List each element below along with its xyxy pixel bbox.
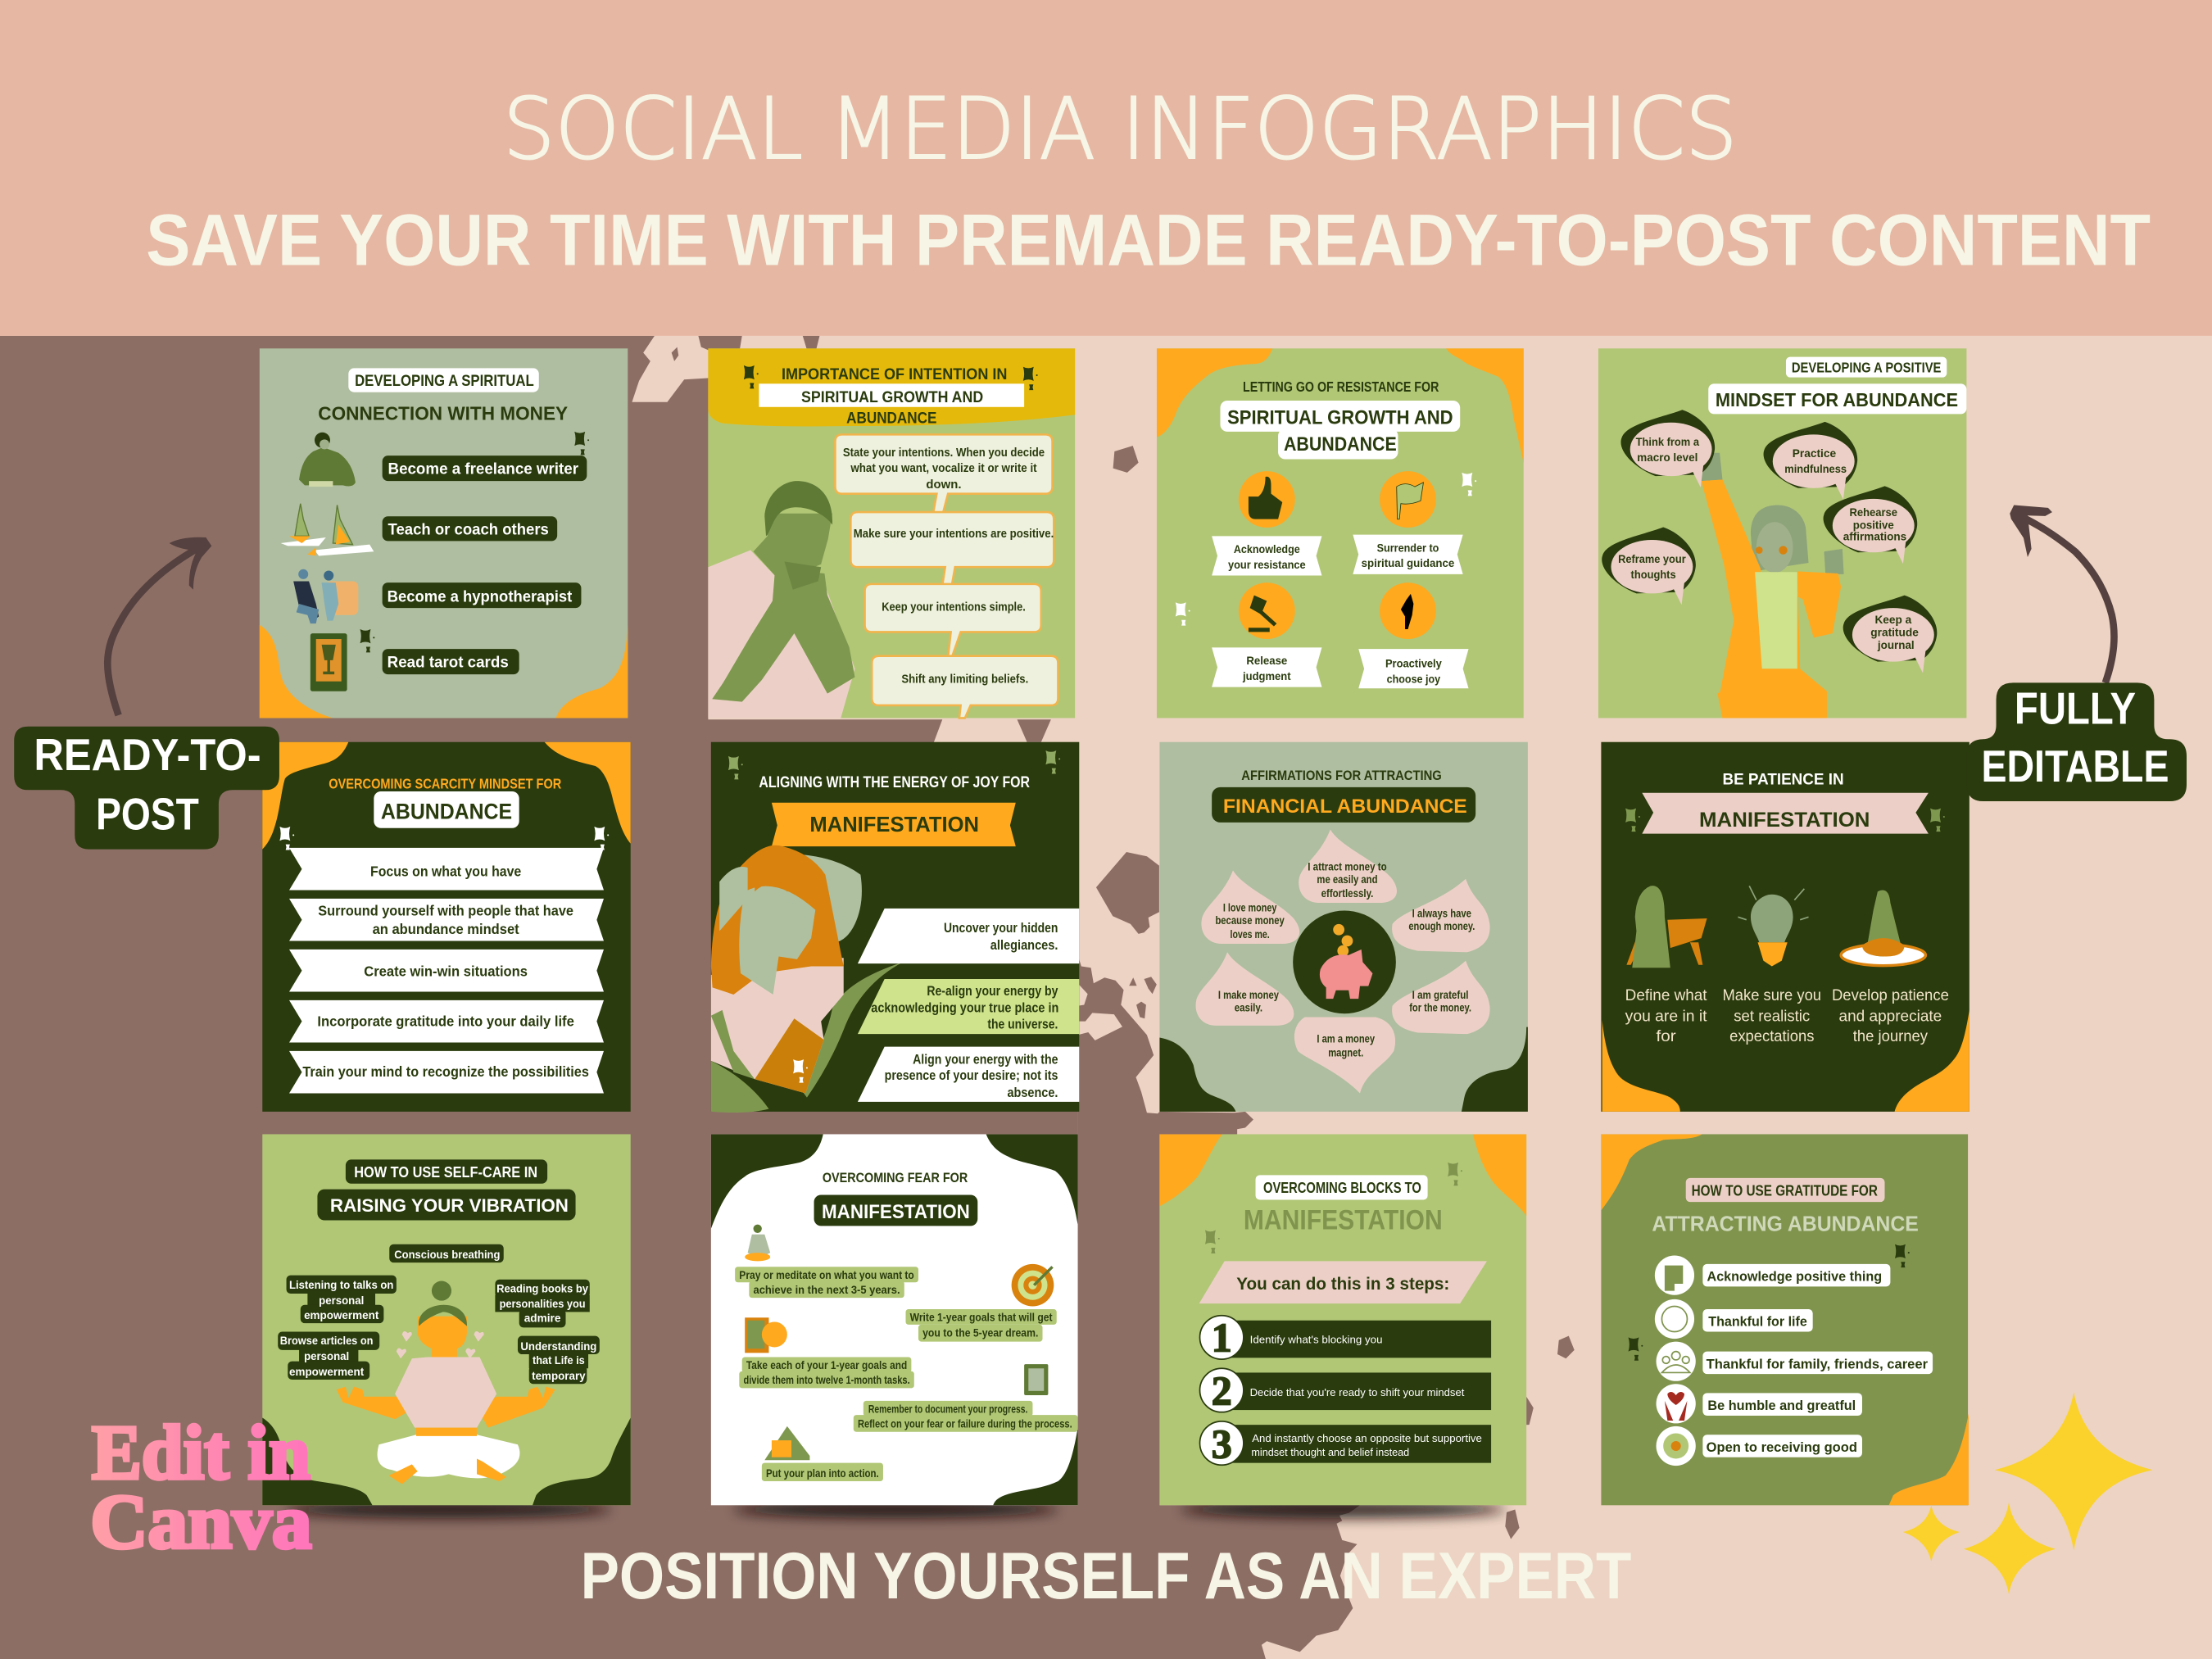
arrow: left <box>107 537 211 715</box>
icons: circles <box>1239 471 1436 639</box>
heading: MANIFESTATION <box>809 814 979 836</box>
list: items: Read tarot cards <box>388 654 509 671</box>
list: items: Become a hypnotherapist <box>388 588 573 605</box>
labels: Understanding <box>520 1340 596 1353</box>
list: items <box>383 456 587 674</box>
bubble text: macro level <box>1637 451 1698 464</box>
captions: Make sure you <box>1722 987 1821 1004</box>
steps: 2 <box>1212 1368 1232 1413</box>
pill text: Take each of your 1-year goals and <box>746 1359 907 1371</box>
panels: Re-align your energy by <box>927 984 1058 999</box>
bubble text: Keep your intentions simple. <box>882 601 1026 614</box>
icon rows <box>1655 1256 1696 1466</box>
bubble text <box>843 446 1054 686</box>
ribbon text: Surround yourself with people that have <box>318 903 573 919</box>
pill text: Pray or meditate on what you want to <box>739 1269 914 1281</box>
arrow: right <box>2010 505 2115 682</box>
petal text: easily. <box>1235 1002 1262 1014</box>
labels <box>278 1244 600 1384</box>
panels <box>858 909 1079 1102</box>
pill text <box>739 1269 1072 1480</box>
labels: Browse articles on <box>280 1335 373 1347</box>
labels: admire <box>524 1312 561 1324</box>
pill text: Put your plan into action. <box>766 1467 879 1480</box>
labels: personal <box>304 1350 349 1362</box>
bubble text: thoughts <box>1631 569 1676 581</box>
petal text: I make money <box>1218 989 1279 1001</box>
labels: temporary <box>532 1370 586 1382</box>
speech bubbles <box>835 434 1058 718</box>
heading: ABUNDANCE <box>846 410 936 428</box>
petal text: for the money. <box>1409 1002 1471 1014</box>
ribbon text: Train your mind to recognize the possibilities <box>302 1063 589 1080</box>
panels: absence. <box>1007 1086 1058 1100</box>
labels: empowerment <box>304 1309 379 1321</box>
heading: OVERCOMING SCARCITY MINDSET FOR <box>329 776 562 792</box>
heading <box>759 774 1030 846</box>
heading: ALIGNING WITH THE ENERGY OF JOY FOR <box>759 774 1030 791</box>
bubble text: mindfulness <box>1784 463 1847 475</box>
petal text: loves me. <box>1231 928 1270 941</box>
petal text: enough money. <box>1408 920 1475 932</box>
heading <box>814 1171 977 1226</box>
petal text: I attract money to <box>1308 860 1387 873</box>
ribbon text: Proactively <box>1385 657 1442 669</box>
heading: HOW TO USE SELF-CARE IN <box>354 1164 537 1181</box>
pill text: divide them into twelve 1-month tasks. <box>743 1374 910 1386</box>
captions: you are in it <box>1625 1009 1707 1026</box>
heading <box>1708 357 1966 414</box>
bubble text: Make sure your intentions are positive. <box>854 528 1054 541</box>
list: Thankful for family, friends, career <box>1707 1357 1929 1371</box>
ribbon text <box>1228 542 1455 685</box>
bubble text: Practice <box>1793 447 1836 460</box>
pill text: Reflect on your fear or failure during the process. <box>858 1418 1072 1430</box>
steps: And instantly choose an opposite but supportive <box>1252 1432 1482 1444</box>
labels: that Life is <box>533 1354 585 1367</box>
ribbon text: Incorporate gratitude into your daily life <box>317 1013 574 1030</box>
panels: allegiances. <box>990 938 1058 953</box>
bubble text: down. <box>926 478 962 492</box>
panel: using gratitude <box>1601 1134 1969 1505</box>
pill text: achieve in the next 3-5 years. <box>754 1284 900 1296</box>
heading: ABUNDANCE <box>1284 433 1397 456</box>
ribbon text: judgment <box>1242 670 1291 682</box>
ribbon text <box>302 863 589 1080</box>
captions: Develop patience <box>1832 987 1949 1004</box>
panel: raising your vibration <box>262 1134 631 1505</box>
illustration: woman <box>1702 453 1844 718</box>
bubble text: Rehearse <box>1849 506 1897 519</box>
steps: mindset thought and belief instead <box>1251 1446 1409 1458</box>
heading <box>1220 378 1460 459</box>
list: Be humble and greatful <box>1707 1398 1856 1413</box>
panel: overcoming scarcity <box>262 742 631 1112</box>
captions: expectations <box>1729 1028 1814 1045</box>
heading: AFFIRMATIONS FOR ATTRACTING <box>1241 768 1442 783</box>
panels: Uncover your hidden <box>944 921 1058 936</box>
badge: ready-to-post <box>14 727 279 850</box>
panel: overcoming blocks <box>1159 1134 1526 1505</box>
heading: MANIFESTATION <box>1699 809 1870 832</box>
icon: hypnotherapist <box>293 569 358 623</box>
steps: 1 <box>1212 1316 1232 1361</box>
heading: DEVELOPING A SPIRITUAL <box>355 373 534 390</box>
petal text: me easily and <box>1317 873 1377 886</box>
badge: fully editable: EDITABLE <box>1981 741 2169 791</box>
edit in canva: Edit in <box>92 1411 310 1496</box>
edit in canva: Canva <box>90 1480 312 1565</box>
icon: piggy bank <box>1293 911 1396 1013</box>
illustration: meditating woman <box>337 1281 555 1484</box>
petal text: magnet. <box>1328 1047 1363 1059</box>
ribbon text: Create win-win situations <box>364 963 528 980</box>
captions: set realistic <box>1734 1009 1810 1026</box>
heading <box>759 365 1024 428</box>
bubble text: Reframe your <box>1618 553 1686 565</box>
header band <box>0 0 2212 336</box>
torn brown background shape <box>0 336 1575 1659</box>
icons: woman, bulb, meditation <box>1626 886 1925 968</box>
bubble text: gratitude <box>1870 627 1919 639</box>
labels: personalities you <box>500 1298 586 1310</box>
edit in canva <box>90 1411 312 1565</box>
heading <box>1652 1178 1919 1235</box>
ribbon text: Release <box>1246 655 1288 667</box>
heading: SPIRITUAL GROWTH AND <box>1227 406 1453 428</box>
pill text: Write 1-year goals that will get <box>910 1312 1053 1324</box>
ribbons <box>1212 535 1469 688</box>
icon: writer <box>299 433 356 487</box>
steps: Identify what's blocking you <box>1250 1333 1383 1345</box>
list: items: Become a freelance writer <box>388 461 579 478</box>
labels: Reading books by <box>496 1282 588 1294</box>
bubble text <box>1618 436 1919 651</box>
panel: aligning with joy <box>711 742 1079 1113</box>
petal text: effortlessly. <box>1321 887 1373 900</box>
captions: for <box>1657 1028 1676 1045</box>
illustration: praying man <box>708 481 854 718</box>
heading <box>329 776 562 828</box>
heading: HOW TO USE GRATITUDE FOR <box>1692 1182 1878 1199</box>
badge: ready-to-post: POST <box>96 788 199 839</box>
labels: empowerment <box>289 1366 365 1378</box>
bubble text: Think from a <box>1636 436 1699 448</box>
ribbon text: choose joy <box>1387 673 1440 685</box>
panel: mindset for abundance <box>1598 348 1966 718</box>
list: Thankful for life <box>1708 1315 1807 1330</box>
heading: RAISING YOUR VIBRATION <box>330 1195 569 1216</box>
panel: letting go of resistance <box>1157 348 1524 718</box>
petals <box>1196 829 1490 1094</box>
ribbon text: Focus on what you have <box>370 863 521 879</box>
heading <box>1244 1175 1443 1236</box>
panels: Align your energy with the <box>913 1052 1058 1067</box>
pill text: Remember to document your progress. <box>868 1403 1027 1416</box>
pill text: you to the 5-year dream. <box>922 1327 1038 1339</box>
captions <box>1625 987 1949 1045</box>
heading <box>1642 771 1929 834</box>
ribbon text: Acknowledge <box>1234 543 1300 555</box>
list: Acknowledge positive thing <box>1707 1270 1882 1285</box>
petal text: I am a money <box>1317 1033 1375 1045</box>
steps: Decide that you're ready to shift your mindset <box>1250 1386 1465 1398</box>
heading: LETTING GO OF RESISTANCE FOR <box>1243 378 1439 395</box>
heading: IMPORTANCE OF INTENTION IN <box>782 365 1007 383</box>
badge: fully editable <box>1966 682 2187 801</box>
captions: Define what <box>1625 987 1707 1004</box>
icon: tarot card <box>310 633 347 691</box>
heading: SPIRITUAL GROWTH AND <box>801 388 983 406</box>
petal text: because money <box>1215 914 1285 927</box>
bubble text: State your intentions. When you decide <box>843 446 1045 460</box>
sparkles: decorative stars <box>1903 1393 2153 1594</box>
bubble text: journal <box>1877 639 1915 651</box>
heading: DEVELOPING A POSITIVE <box>1792 360 1941 376</box>
panel: developing a spiritual connection <box>260 348 628 718</box>
captions: the journey <box>1853 1028 1929 1045</box>
petal text: I always have <box>1412 907 1471 919</box>
labels: Listening to talks on <box>289 1279 393 1291</box>
ribbon text: an abundance mindset <box>373 921 519 937</box>
panels: presence of your desire; not its <box>885 1068 1058 1083</box>
captions: and appreciate <box>1839 1009 1942 1026</box>
heading: CONNECTION WITH MONEY <box>318 402 569 424</box>
heading <box>1212 768 1475 823</box>
heading: OVERCOMING FEAR FOR <box>823 1171 968 1185</box>
icons <box>745 1225 1054 1460</box>
bubble text: Keep a <box>1874 614 1912 626</box>
labels: Conscious breathing <box>394 1249 500 1261</box>
heading: MANIFESTATION <box>822 1201 970 1223</box>
list: items: Teach or coach others <box>388 522 549 539</box>
list <box>1702 1264 1933 1457</box>
ribbon text: spiritual guidance <box>1362 557 1455 569</box>
badge: fully editable: FULLY <box>2015 682 2136 733</box>
heading: MANIFESTATION <box>1244 1205 1443 1236</box>
ribbon text: Surrender to <box>1377 542 1439 554</box>
ribbon text: your resistance <box>1228 559 1306 571</box>
bubble text: what you want, vocalize it or write it <box>850 462 1037 475</box>
panel: affirmations <box>1159 742 1528 1112</box>
panels: acknowledging your true place in <box>871 1000 1058 1015</box>
bubble text: positive <box>1853 519 1894 532</box>
steps: 3 <box>1212 1421 1232 1466</box>
heading <box>317 1159 576 1220</box>
panel: be patience <box>1601 742 1969 1112</box>
footer tagline: POSITION YOURSELF AS AN EXPERT <box>581 1539 1631 1613</box>
title: SOCIAL MEDIA INFOGRAPHICS <box>503 80 1738 179</box>
panel: importance of intention <box>708 348 1075 718</box>
heading: ABUNDANCE <box>381 800 512 824</box>
callout <box>1199 1261 1487 1303</box>
badge: ready-to-post: READY-TO- <box>34 729 261 780</box>
heading: OVERCOMING BLOCKS TO <box>1263 1180 1421 1196</box>
heading: ATTRACTING ABUNDANCE <box>1652 1213 1919 1235</box>
bubble text: Shift any limiting beliefs. <box>901 673 1028 686</box>
petal text <box>1215 860 1475 1059</box>
icon: yoga coaches <box>281 504 374 555</box>
speech bubbles <box>1602 410 1937 673</box>
bubble text: affirmations <box>1843 531 1907 543</box>
heading <box>318 368 569 424</box>
petal text: I love money <box>1223 901 1277 913</box>
steps <box>1200 1316 1491 1466</box>
shadows under bottom row <box>287 1501 1505 1518</box>
heading: BE PATIENCE IN <box>1722 771 1844 788</box>
heading: MINDSET FOR ABUNDANCE <box>1716 389 1958 410</box>
panels: the universe. <box>987 1017 1058 1031</box>
text pills <box>735 1267 1078 1481</box>
list: Open to receiving good <box>1707 1440 1857 1455</box>
panel: overcoming fear <box>711 1134 1078 1505</box>
ribbons <box>289 848 604 1094</box>
petal text: I am grateful <box>1412 989 1469 1001</box>
heading: FINANCIAL ABUNDANCE <box>1223 796 1467 818</box>
labels: personal <box>319 1294 364 1307</box>
illustration: woman and leaves <box>711 845 903 1113</box>
callout: You can do this in 3 steps: <box>1236 1274 1449 1294</box>
